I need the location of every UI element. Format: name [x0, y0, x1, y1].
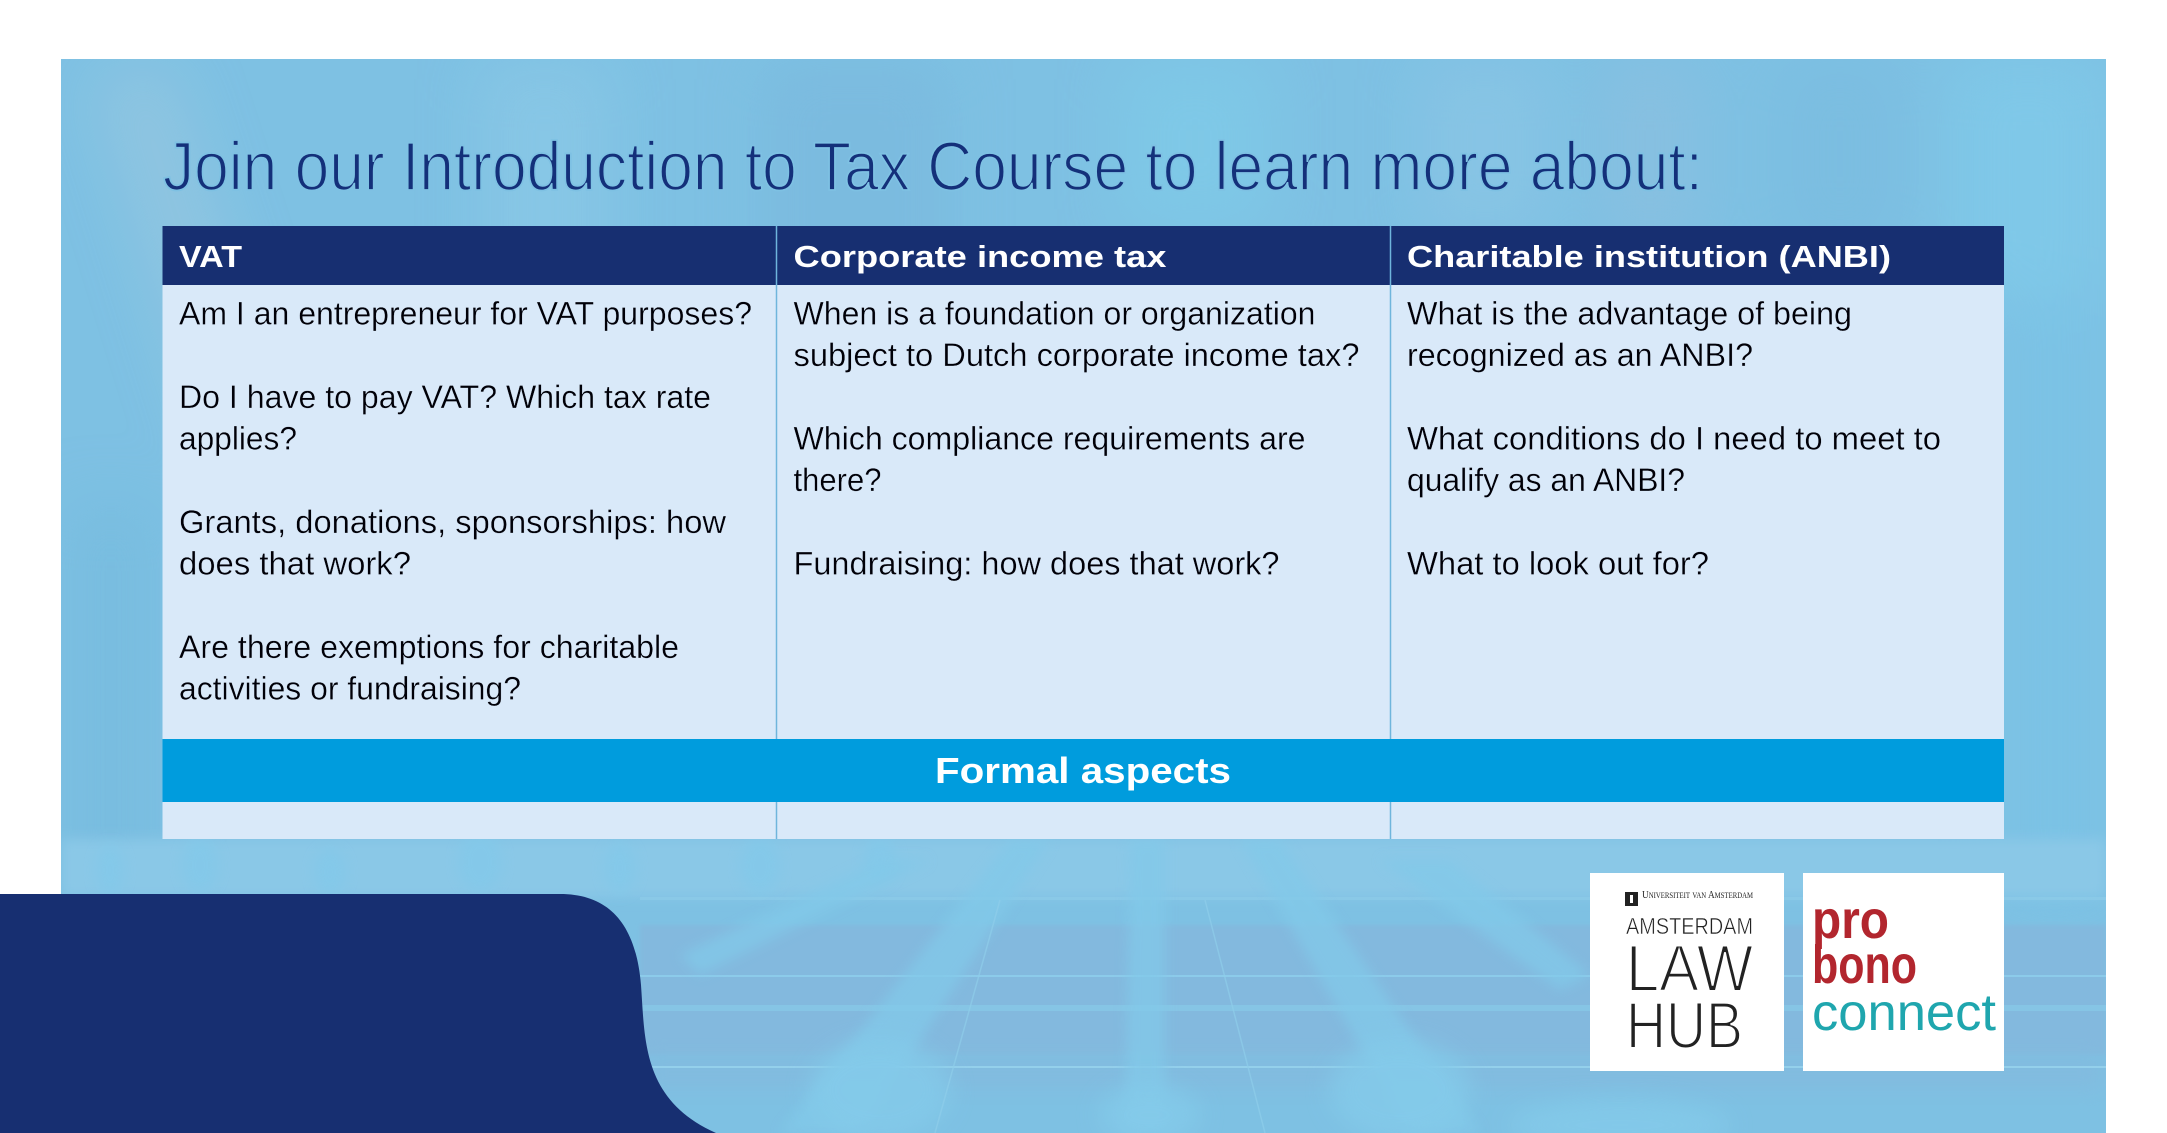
column text: corporate income tax questions: there?: [794, 462, 882, 498]
column text: corporate income tax questions: Which compliance requirements are: [794, 420, 1306, 456]
column heading: VAT: VAT: [179, 239, 242, 274]
column text: VAT questions: [179, 296, 752, 706]
column text: ANBI questions: qualify as an ANBI?: [1407, 462, 1685, 498]
table: [162, 226, 2004, 839]
logo: Amsterdam Law Hub: HUB: [1626, 988, 1743, 1062]
column text: corporate income tax questions: [794, 296, 1360, 582]
column text: ANBI questions: [1407, 296, 1941, 582]
table body background: [162, 285, 2004, 839]
column heading: Corporate income tax: Corporate income tax: [794, 239, 1167, 274]
column text: VAT questions: Are there exemptions for charitable: [179, 629, 679, 665]
logo: Amsterdam Law Hub: [1590, 873, 1784, 1071]
column text: ANBI questions: What is the advantage of being: [1407, 296, 1852, 332]
title: Join our Introduction to Tax Course to learn more about:: [163, 128, 1703, 205]
band: formal aspects: [162, 739, 2004, 802]
darker horizontal bands: [640, 897, 2106, 1068]
column text: ANBI questions: What conditions do I need to meet to: [1407, 420, 1941, 456]
logo: Amsterdam Law Hub: AMSTERDAM: [1626, 913, 1753, 939]
logo: Amsterdam Law Hub: Universiteit van Amsterdam: [1642, 889, 1753, 901]
column dividers: [776, 226, 1390, 839]
band: formal aspects: Formal aspects: [935, 750, 1231, 791]
column text: VAT questions: activities or fundraising?: [179, 670, 521, 706]
column text: ANBI questions: What to look out for?: [1407, 546, 1709, 582]
logo: pro bono connect: bono: [1812, 935, 1917, 995]
table header bar: [162, 226, 2004, 285]
shape: navy corner block: [0, 894, 716, 1133]
column text: corporate income tax questions: subject to Dutch corporate income tax?: [794, 337, 1360, 373]
column text: corporate income tax questions: When is a foundation or organization: [794, 296, 1316, 332]
light rays: [690, 924, 1578, 1078]
column text: VAT questions: applies?: [179, 420, 297, 456]
logo: Amsterdam Law Hub: LAW: [1626, 931, 1754, 1005]
column text: VAT questions: Am I an entrepreneur for VAT purposes?: [179, 296, 752, 332]
column text: VAT questions: Do I have to pay VAT? Which tax rate: [179, 379, 711, 415]
logo: pro bono connect: pro: [1812, 890, 1889, 950]
bokeh band below table: [62, 839, 2105, 896]
column text: VAT questions: does that work?: [179, 546, 411, 582]
column text: ANBI questions: recognized as an ANBI?: [1407, 337, 1753, 373]
icon: university crest: [1625, 892, 1638, 906]
logo: pro bono connect: [1803, 873, 2004, 1071]
column text: VAT questions: Grants, donations, sponsorships: how: [179, 504, 727, 540]
column text: corporate income tax questions: Fundraising: how does that work?: [794, 546, 1280, 582]
column heading: Charitable institution: Charitable institution (ANBI): [1407, 239, 1891, 274]
glow spots: [880, 1052, 1462, 1121]
logo: pro bono connect: connect: [1812, 984, 1997, 1042]
